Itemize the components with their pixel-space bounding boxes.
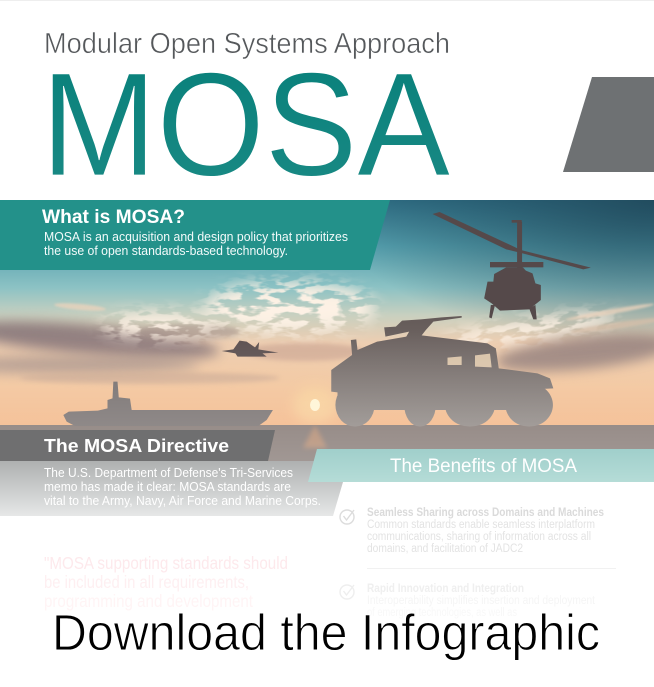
grey parallelogram accent — [563, 77, 654, 172]
quote text: programming and development — [44, 591, 253, 611]
photo: sunset sky with military silhouettes — [0, 200, 654, 485]
title: MOSA: MOSA — [41, 43, 450, 207]
benefit: rapid innovation: Interoperability simplifies insertion and deployment — [367, 595, 596, 607]
icon: check circle — [340, 510, 354, 524]
benefit: rapid innovation: Rapid Innovation and Integration — [367, 583, 524, 595]
benefit: seamless sharing — [340, 507, 604, 555]
sun — [296, 391, 334, 422]
benefit: seamless sharing: communications, sharing of information across all — [367, 531, 591, 543]
benefit: rapid innovation — [340, 583, 596, 619]
quote text: "MOSA supporting standards should — [44, 553, 288, 573]
benefit: seamless sharing: Common standards enable seamless interplatform — [367, 519, 595, 531]
panel: The Benefits of MOSA header: The Benefits of MOSA — [390, 455, 577, 477]
icon: aircraft carrier — [63, 382, 273, 426]
benefit: seamless sharing: domains, and facilitation of JADC2 — [367, 543, 523, 555]
panel: What is MOSA? — [0, 200, 390, 270]
panel: The MOSA Directive — [0, 430, 343, 516]
quote text: be included in all requirements, — [44, 572, 249, 592]
text: MOSA definition: MOSA is an acquisition and design policy that prioritizes — [44, 230, 348, 244]
icon: helicopter — [433, 212, 591, 319]
vehicle windows — [448, 354, 492, 367]
clouds — [0, 282, 654, 384]
panel: The Benefits of MOSA header — [308, 449, 654, 482]
text: directive description: memo has made it clear: MOSA standards are — [44, 480, 291, 494]
heading: The MOSA Directive: The MOSA Directive — [44, 435, 229, 456]
benefit: rapid innovation: of emerging technologies, as well as — [367, 607, 517, 619]
icon: fighter jet — [222, 341, 278, 357]
icon: faded check circle — [340, 585, 354, 599]
white wash over lower photo — [0, 354, 654, 461]
text: directive description: vital to the Army, Navy, Air Force and Marine Corps. — [44, 494, 321, 508]
text: directive description: The U.S. Department of Defense's Tri-Services — [44, 466, 293, 480]
glow on ground — [303, 425, 327, 448]
text: MOSA definition: the use of open standards-based technology. — [44, 244, 288, 258]
heading: What is MOSA?: What is MOSA? — [42, 207, 185, 228]
subtitle: Modular Open Systems Approach: Modular Open Systems Approach — [44, 28, 450, 60]
ground — [0, 425, 654, 461]
call to action: Download the Infographic: Download the Infographic — [52, 604, 600, 661]
icon: armored vehicle with mounted gun — [331, 316, 553, 427]
benefit: seamless sharing: Seamless Sharing across Domains and Machines — [367, 507, 604, 519]
